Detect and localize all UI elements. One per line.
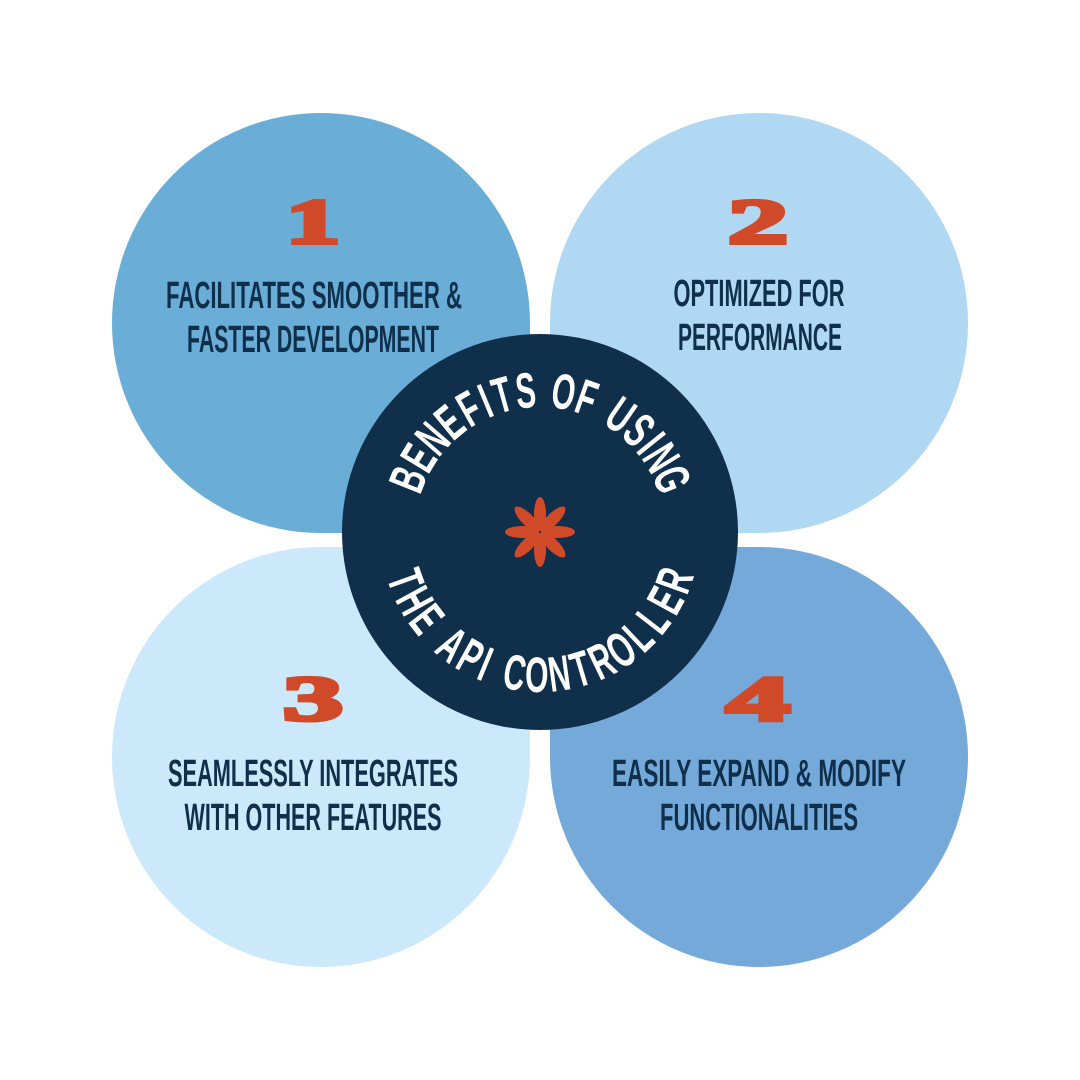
text: benefit 4: FUNCTIONALITIES (660, 797, 858, 839)
text: benefit 2: PERFORMANCE (678, 317, 842, 359)
title: bottom arc: L (626, 595, 681, 644)
title: top arc: N (632, 434, 691, 482)
title: bottom arc: C (499, 643, 530, 702)
title: top arc: G (642, 458, 702, 500)
title: top arc: O (548, 363, 580, 421)
title: top arc: N (405, 412, 461, 465)
text: benefit 3: SEAMLESSLY INTEGRATES (168, 753, 458, 795)
text: benefit 2: OPTIMIZED FOR (674, 273, 844, 315)
number 4: 4 (726, 663, 790, 734)
title: bottom arc: T (376, 562, 435, 598)
title: bottom arc: E (398, 594, 455, 644)
title: top arc: F (569, 369, 605, 427)
text: benefit 2 (674, 273, 844, 359)
title: top arc: F (448, 380, 491, 438)
title: bottom arc: O (596, 620, 646, 679)
text: benefit 3: WITH OTHER FEATURES (184, 797, 442, 839)
text: benefit 4 (612, 753, 906, 839)
panel: benefit 2 (550, 113, 968, 533)
title: top arc: E (390, 435, 448, 481)
panel: benefit 4 (550, 547, 968, 967)
title: bottom arc (376, 561, 705, 703)
panel: benefit 3 (112, 547, 530, 967)
text: benefit 1 (166, 275, 462, 361)
number 3: 3 (283, 663, 343, 734)
title: bottom arc: P (448, 628, 493, 686)
title: bottom arc: L (613, 609, 664, 662)
icon: asterisk flower (505, 497, 575, 567)
text: benefit 3 (168, 753, 458, 839)
title: bottom arc: R (645, 561, 705, 600)
title: top arc: T (486, 366, 519, 424)
title: bottom arc: O (524, 647, 549, 703)
panel: benefit 1 (112, 113, 530, 533)
text: benefit 1: FACILITATES SMOOTHER & (166, 275, 462, 317)
title: top arc: U (596, 386, 645, 444)
title: bottom arc: N (545, 645, 574, 703)
title: bottom arc: I (471, 637, 500, 692)
center badge (342, 334, 738, 730)
title: bottom arc: T (564, 640, 598, 698)
text: benefit 1: FASTER DEVELOPMENT (187, 319, 439, 361)
number 2: 2 (728, 186, 788, 257)
title: bottom arc: A (426, 616, 478, 673)
title: top arc: S (513, 362, 538, 420)
number 1: 1 (286, 186, 340, 257)
title: top arc: I (471, 374, 500, 428)
title: bottom arc: E (636, 578, 695, 623)
title: bottom arc: R (580, 631, 624, 691)
title: bottom arc: H (385, 578, 444, 624)
title: top arc: S (612, 403, 666, 457)
title: top arc: E (424, 394, 475, 450)
title: top arc: B (378, 459, 438, 500)
title: top arc (378, 362, 702, 500)
title: top arc: I (627, 423, 675, 464)
